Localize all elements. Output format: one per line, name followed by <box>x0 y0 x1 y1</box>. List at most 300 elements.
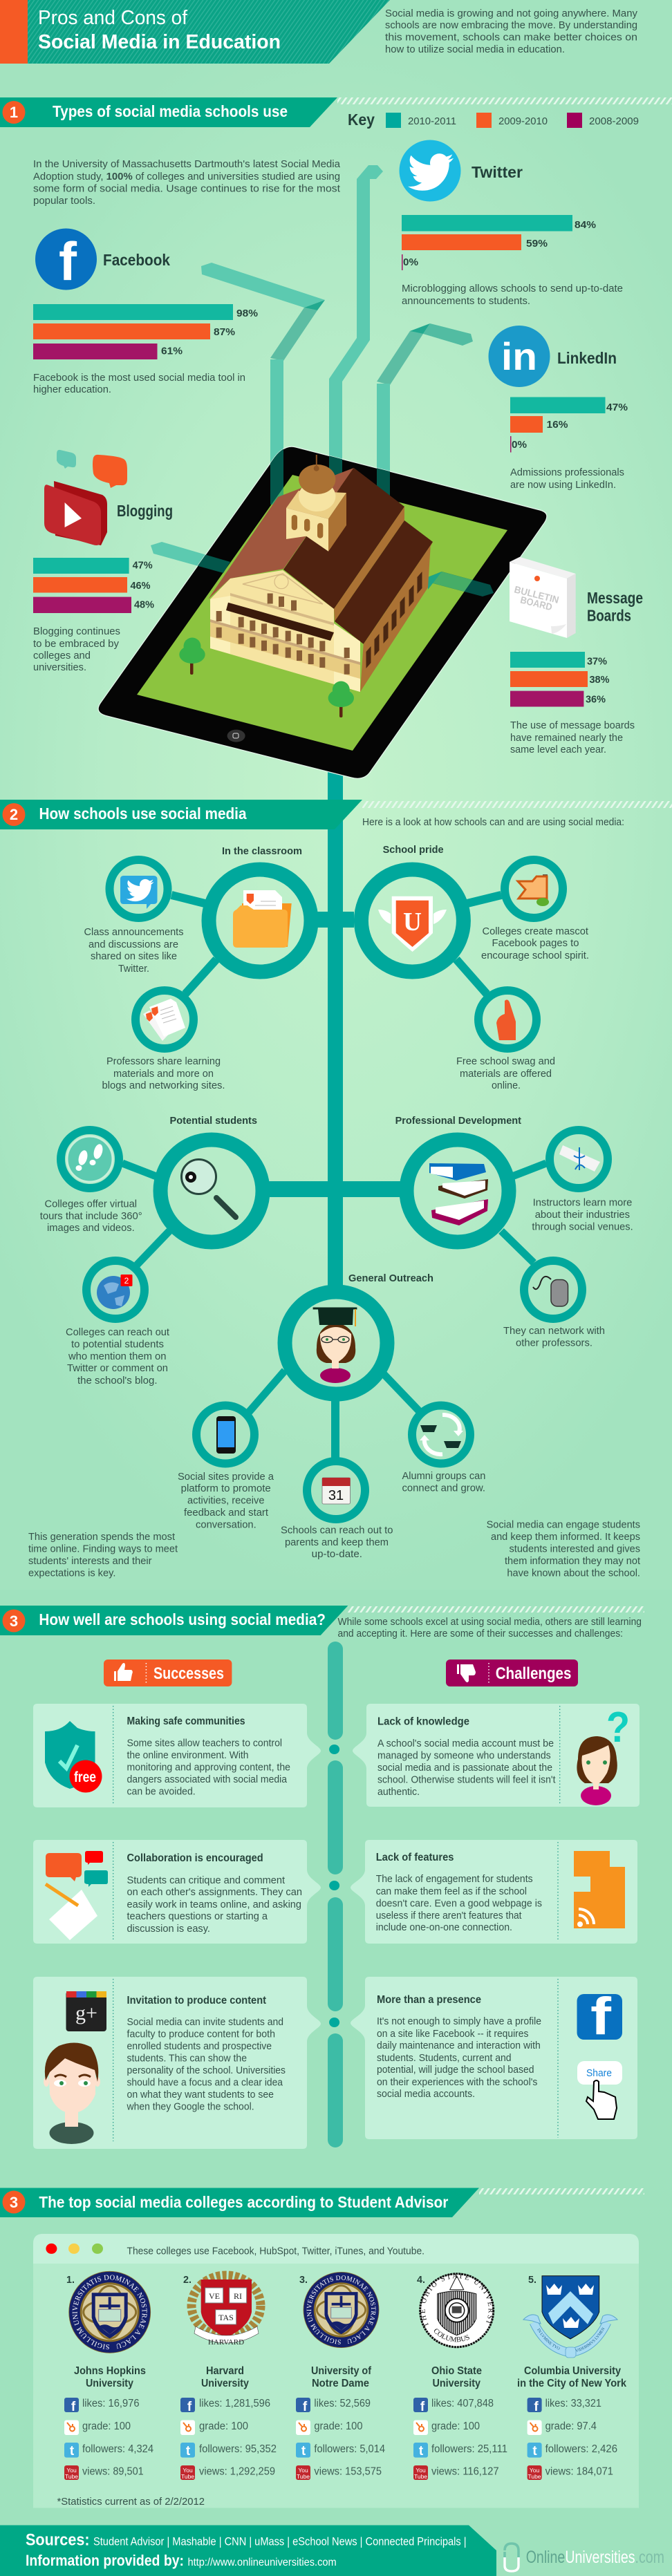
title: Pros and Cons of <box>38 7 188 29</box>
college 4: Ohio State <box>431 2365 482 2377</box>
section 1 heading <box>0 97 672 127</box>
stats: likes: 16,976 <box>82 2398 140 2409</box>
hub: general outreach: General Outreach <box>348 1272 433 1284</box>
hub: in the classroom: blogs and networking sites. <box>102 1080 225 1091</box>
icon: twitter <box>400 140 460 202</box>
stats: Tube <box>528 2473 541 2480</box>
crowns <box>546 2284 594 2328</box>
hub: in the classroom <box>84 845 329 1091</box>
icon: share button with cursor: Share <box>586 2067 612 2079</box>
stats <box>180 2398 277 2480</box>
section 2 heading: 2 <box>10 806 18 823</box>
bar chart: facebook: 87% <box>214 327 235 338</box>
college 1: University <box>86 2378 133 2389</box>
hub: general outreach: up-to-date. <box>312 1548 362 1560</box>
card: lack of features: can make them feel as if the school <box>376 1886 527 1897</box>
linkedin panel <box>488 326 628 491</box>
bar chart: message boards <box>510 652 610 706</box>
trees <box>179 637 354 717</box>
stats: grade: 100 <box>82 2420 131 2432</box>
card: making safe communities: can be avoided. <box>127 1786 196 1798</box>
card: invitation to produce content: enrolled students and prospective <box>127 2040 272 2052</box>
sources: Student Advisor | Mashable | CNN | uMass | eSchool News | Connected Principals | <box>93 2535 466 2548</box>
stats: You <box>416 2467 426 2474</box>
icon: bulletin board: BULLETIN <box>513 583 560 605</box>
crest: harvard: HARVARD <box>208 2338 244 2347</box>
facebook panel <box>33 228 258 395</box>
key legend <box>348 111 639 129</box>
bar chart: linkedin: 0% <box>512 440 527 451</box>
footnote: *Statistics current as of 2/2/2012 <box>57 2496 205 2508</box>
icon: calendar <box>322 1478 350 1504</box>
crest: columbia <box>523 2275 618 2358</box>
icon: bubbles, pencil and paper <box>46 1851 108 1940</box>
information provided by: http://www.onlineuniversities.com <box>188 2557 337 2568</box>
card: collaboration: Students can critique and comment <box>127 1874 286 1886</box>
linkedin panel: Admissions professionals <box>510 467 624 478</box>
college 1 <box>64 2271 153 2480</box>
card: more than a presence <box>351 1977 637 2139</box>
hub: professional development: other professors. <box>516 1337 592 1349</box>
message boards panel: have remained nearly the <box>510 732 623 744</box>
stats: followers: 25,111 <box>431 2443 507 2455</box>
card: lack of knowledge: A school's social media account must be <box>377 1738 554 1749</box>
college 2 <box>180 2274 277 2480</box>
icon: mouse <box>533 1277 568 1306</box>
colleges panel <box>33 2234 639 2508</box>
hub: professional development: They can network with <box>503 1325 605 1337</box>
note: engage students <box>487 1519 641 1579</box>
crest: columbia: IN LVMINE TVO <box>537 2328 560 2350</box>
key legend: 2010-2011 <box>408 115 456 127</box>
stats <box>413 2398 507 2480</box>
stats: followers: 4,324 <box>82 2443 153 2455</box>
college 3: University of <box>311 2365 372 2377</box>
card: invitation to produce content: faculty to produce content for both <box>127 2029 275 2040</box>
college 4 <box>413 2273 507 2480</box>
sources <box>26 2531 466 2550</box>
stats: t <box>186 2444 191 2459</box>
icon: magnifier <box>181 1160 236 1217</box>
card: lack of features: The lack of engagement for students <box>376 1873 533 1885</box>
stats: f <box>303 2400 308 2414</box>
intro text: this movement, schools can make better choices on <box>385 32 637 43</box>
linkedin panel: LinkedIn <box>557 349 617 367</box>
bar chart: message boards: 38% <box>589 675 610 686</box>
card: invitation to produce content: Social media can invite students and <box>127 2016 283 2028</box>
card: invitation to produce content: should have a focus and a clear idea <box>127 2077 283 2089</box>
note: this generation: expectations is key. <box>28 1567 115 1579</box>
college 3: 3. <box>299 2274 308 2286</box>
hub: school pride <box>342 844 589 1091</box>
hub: potential students: images and videos. <box>47 1222 135 1234</box>
bar chart: blogging: 48% <box>134 600 154 611</box>
icon: question mark: ? <box>606 1704 630 1751</box>
stats: f <box>187 2400 192 2414</box>
hub: general outreach <box>178 1272 485 1560</box>
card: invitation to produce content <box>33 1977 321 2149</box>
stats: views: 153,575 <box>314 2466 382 2478</box>
stats: grade: 97.4 <box>545 2420 597 2432</box>
message boards panel <box>510 557 643 755</box>
stats: Tube <box>181 2473 194 2480</box>
card: invitation to produce content: when they Google the school. <box>127 2101 254 2113</box>
linkedin panel: are now using LinkedIn. <box>510 479 616 491</box>
icon: facebook: f <box>59 231 77 292</box>
central pillar <box>328 1642 343 2147</box>
icon: bulletin board <box>510 557 576 638</box>
bar chart: facebook: 98% <box>236 308 258 319</box>
icon: speech bubbles and video <box>44 450 127 545</box>
hub: potential students: Twitter or comment on <box>67 1362 168 1374</box>
note: engage students: have known about the school. <box>507 1567 640 1579</box>
card: collaboration <box>33 1840 321 1944</box>
crest: columbia: VIDEBIMVS LVMEN <box>575 2327 604 2352</box>
college 4: University <box>433 2378 480 2389</box>
crest: ohio state: COLUMBUS <box>434 2329 469 2342</box>
key legend: Key <box>348 111 375 129</box>
icon: globe: 2 <box>124 1276 129 1286</box>
hub: in the classroom: In the classroom <box>222 845 302 857</box>
crest: harvard: TAS <box>218 2313 234 2322</box>
logo: online universities: OnlineUniversities.com <box>526 2548 664 2567</box>
hub: potential students: Colleges offer virtual <box>44 1198 137 1210</box>
icon: flag <box>518 874 549 906</box>
hub: in the classroom: Class announcements <box>84 926 184 938</box>
hub: potential students: Potential students <box>170 1115 257 1127</box>
college 2: Harvard <box>206 2365 244 2377</box>
college 5: 5. <box>528 2274 536 2286</box>
card: making safe communities: Some sites allow teachers to control <box>127 1738 282 1749</box>
icon: globe <box>97 1275 133 1309</box>
stats <box>64 2398 153 2480</box>
stats: f <box>534 2400 539 2414</box>
hub: professional development <box>342 1115 633 1349</box>
card: making safe communities: Making safe communities <box>127 1715 245 1727</box>
stats: You <box>298 2467 308 2474</box>
blogging panel: universities. <box>33 661 86 673</box>
section 2 heading: How schools use social media <box>39 805 247 822</box>
bar chart: linkedin <box>510 397 628 452</box>
blogging panel: Blogging <box>117 502 173 520</box>
section 2 intro: Here is a look at how schools can and are using social media: <box>362 816 624 828</box>
stats <box>528 2398 617 2480</box>
college 3: Notre Dame <box>312 2378 369 2389</box>
stats: views: 184,071 <box>545 2466 613 2478</box>
icon: papers <box>143 999 185 1041</box>
button: successes: Successes <box>153 1664 224 1683</box>
hub: school pride: Colleges create mascot <box>483 925 589 937</box>
message boards panel: Boards <box>587 607 631 625</box>
blogging panel: to be embraced by <box>33 638 119 650</box>
section 3 intro: and accepting it. Here are some of their successes and challenges: <box>337 1628 623 1639</box>
footer <box>0 2526 496 2576</box>
card: lack of knowledge: school. Otherwise students will feel it isn't <box>377 1774 556 1786</box>
note: this generation <box>28 1531 178 1579</box>
card: making safe communities <box>33 1704 321 1807</box>
icon: facebook square <box>577 1987 622 2046</box>
colleges panel: These colleges use Facebook, HubSpot, Twitter, iTunes, and Youtube. <box>127 2245 424 2257</box>
stats: t <box>70 2444 75 2459</box>
ribbon over lawn <box>271 488 473 592</box>
section 4 heading: 3 <box>10 2194 18 2211</box>
card: collaboration: teachers questions or starting a <box>127 1910 268 1922</box>
icon: facebook square: f <box>590 1987 612 2046</box>
twitter panel: announcements to students. <box>402 295 530 307</box>
hub: in the classroom: materials and more on <box>113 1068 214 1080</box>
intro paragraph <box>33 158 341 207</box>
twitter panel: Microblogging allows schools to send up-to-date <box>402 283 623 294</box>
hub: general outreach: activities, receive <box>187 1495 264 1507</box>
icon: winged shield <box>378 896 447 952</box>
hub: in the classroom: shared on sites like <box>91 950 177 962</box>
crest: ohio state: THE OHIO STATE UNIVERSITY <box>420 2273 494 2328</box>
stats: views: 89,501 <box>82 2466 144 2478</box>
card: making safe communities: dangers associated with social media <box>127 1774 288 1785</box>
card: lack of features <box>351 1840 637 1944</box>
blogging panel: colleges and <box>33 650 91 661</box>
bar chart: blogging <box>33 558 154 613</box>
bar chart: blogging: 46% <box>130 581 151 592</box>
bar chart: twitter: 59% <box>526 238 548 250</box>
note: engage students: Social media can engage students <box>487 1519 640 1531</box>
message boards panel: same level each year. <box>510 744 606 755</box>
icon: books <box>429 1163 488 1225</box>
stats: You <box>530 2467 539 2474</box>
button: successes <box>104 1660 232 1686</box>
sources: Sources: <box>26 2531 90 2550</box>
hub: school pride: Free school swag and <box>456 1055 555 1067</box>
ribbon overlays on tablet <box>198 449 494 596</box>
stats: Tube <box>414 2473 427 2480</box>
window dots <box>46 2244 103 2254</box>
crest: seal: SIGILLUM UNIVERSITATIS DOMINAE NOSTRAE A LACU <box>72 2275 147 2350</box>
blogging panel: Blogging continues <box>33 626 120 637</box>
card: more than a presence: potential, will judge the school based <box>377 2064 534 2076</box>
bar chart: facebook: 61% <box>161 346 183 357</box>
twitter panel: Twitter <box>472 163 523 181</box>
stats: views: 1,292,259 <box>199 2466 275 2478</box>
note: this generation: students' interests and their <box>28 1555 152 1567</box>
icon: shield with free badge: free <box>74 1769 96 1785</box>
icon: phone <box>216 1416 236 1454</box>
card: invitation to produce content: on what they want students to see <box>127 2089 274 2100</box>
intro text: Social media is growing and not going anywhere. Many <box>385 8 637 19</box>
icon: shield with free badge <box>45 1721 102 1793</box>
icon: puzzle with rss <box>574 1851 625 1928</box>
header banner <box>0 0 390 64</box>
card: lack of features: include one-on-one connection. <box>376 1921 512 1933</box>
hub: in the classroom: Twitter. <box>118 963 149 975</box>
card: more than a presence: daily maintenance and interaction with <box>377 2040 541 2051</box>
card: lack of knowledge: managed by someone who understands <box>377 1750 551 1762</box>
information provided by <box>26 2552 337 2569</box>
twitter panel <box>400 140 623 307</box>
hub: professional development: through social venues. <box>532 1221 633 1233</box>
facebook panel: Facebook is the most used social media tool in <box>33 372 245 384</box>
stats: Tube <box>65 2473 78 2480</box>
stats: likes: 1,281,596 <box>199 2398 270 2409</box>
hub: general outreach: Alumni groups can <box>402 1470 485 1482</box>
icon: folder <box>233 890 292 948</box>
message boards panel: Message <box>587 589 643 607</box>
stats: You <box>183 2467 193 2474</box>
stats: likes: 33,321 <box>545 2398 601 2409</box>
intro paragraph: Adoption study, 100% of colleges and universities studied are using <box>33 171 340 182</box>
bar chart: twitter: 0% <box>403 257 418 268</box>
crest: seal: SIGILLUM UNIVERSITATIS DOMINAE NOSTRAE A LACU <box>307 2275 376 2344</box>
section 3 heading: How well are schools using social media? <box>39 1610 326 1628</box>
icon: graduate <box>313 1308 357 1383</box>
icon: diploma <box>559 1145 600 1172</box>
college 5: in the City of New York <box>517 2378 626 2389</box>
hub: general outreach: connect and grow. <box>402 1482 485 1494</box>
hub: school pride: materials are offered <box>460 1068 552 1080</box>
intro text <box>385 8 637 55</box>
logo: online universities <box>505 2544 664 2571</box>
college 2: 2. <box>183 2274 192 2286</box>
intro text: schools are now embracing the move. By understanding <box>385 19 637 31</box>
stats <box>296 2398 385 2480</box>
card: lack of knowledge <box>353 1704 640 1807</box>
college 1: 1. <box>66 2274 75 2286</box>
card: making safe communities: monitoring and approving content, the <box>127 1762 290 1774</box>
hub: in the classroom: Professors share learning <box>106 1055 221 1067</box>
building <box>208 455 433 692</box>
stats: t <box>532 2444 537 2459</box>
crest: harvard: RI <box>234 2291 242 2301</box>
stats: f <box>71 2400 76 2414</box>
stats: grade: 100 <box>314 2420 363 2432</box>
card: more than a presence: on a site like Facebook -- it requires <box>377 2028 528 2040</box>
bar chart: message boards: 36% <box>586 694 606 705</box>
icon: winged shield: U <box>403 908 422 937</box>
college 2: University <box>201 2378 249 2389</box>
section 3 intro: While some schools excel at using social media, others are still learning <box>337 1616 642 1628</box>
cupola <box>286 455 346 552</box>
hub: potential students: tours that include 360° <box>40 1210 142 1222</box>
button: challenges: Challenges <box>496 1664 571 1683</box>
hub: professional development: about their industries <box>535 1209 630 1221</box>
college 3 <box>296 2272 385 2480</box>
card: lack of knowledge: authentic. <box>377 1786 420 1798</box>
title <box>38 7 281 53</box>
key legend: 2009-2010 <box>498 115 548 127</box>
card: collaboration: on each other's assignments. They can <box>127 1886 302 1898</box>
icon: linkedin <box>488 326 550 387</box>
bar chart: blogging: 47% <box>133 560 153 571</box>
card: invitation to produce content: students. This can show the <box>127 2053 247 2065</box>
hub: general outreach: parents and keep them <box>285 1536 389 1548</box>
college 5: Columbia University <box>524 2365 621 2377</box>
ribbons behind tablet <box>151 165 473 1286</box>
stats: followers: 5,014 <box>314 2443 385 2455</box>
hub: school pride: online. <box>492 1080 521 1091</box>
icon: calendar: 31 <box>328 1488 344 1503</box>
section 3 intro <box>337 1616 642 1639</box>
facebook panel: Facebook <box>103 251 170 269</box>
card: invitation to produce content: Invitation to produce content <box>127 1995 267 2006</box>
message boards panel: The use of message boards <box>510 720 635 731</box>
hub: general outreach: platform to promote <box>181 1483 271 1494</box>
intro paragraph: In the University of Massachusetts Dartmouth's latest Social Media <box>33 158 341 170</box>
card: lack of features: Lack of features <box>376 1852 454 1863</box>
note: engage students: them information they may not <box>505 1555 641 1567</box>
hub: school pride: School pride <box>383 844 444 856</box>
stats: t <box>301 2444 306 2459</box>
stats: t <box>419 2444 424 2459</box>
note: this generation: time online. Finding ways to meet <box>28 1543 178 1555</box>
icon: twitter bubble <box>120 876 158 909</box>
icon: student man <box>44 2042 100 2144</box>
blogging panel <box>33 450 173 673</box>
section 3 heading <box>0 1606 644 1635</box>
stats: Tube <box>297 2473 310 2480</box>
hub: potential students: to potential students <box>71 1338 164 1351</box>
title: Social Media in Education <box>38 31 281 53</box>
intro paragraph: popular tools. <box>33 195 95 207</box>
information provided by: Information provided by: <box>26 2552 184 2569</box>
card: collaboration: discussion is easy. <box>127 1923 210 1935</box>
hub: school pride: encourage school spirit. <box>481 950 589 961</box>
icon: alumni caps <box>420 1415 463 1454</box>
bar chart: message boards: 37% <box>587 656 607 667</box>
card: more than a presence: More than a presence <box>377 1994 481 2006</box>
hub: potential students: the school's blog. <box>77 1375 158 1386</box>
facebook panel: higher education. <box>33 384 111 395</box>
stats: grade: 100 <box>199 2420 248 2432</box>
card: invitation to produce content: personality of the school. Universities <box>127 2065 286 2076</box>
card: more than a presence: students. Students, current and <box>377 2052 512 2064</box>
hub: professional development: Instructors learn more <box>533 1197 632 1209</box>
icon: bulletin board: BOARD <box>519 594 553 612</box>
card: more than a presence: on their experiences with the school's <box>377 2076 537 2088</box>
stats: You <box>66 2467 77 2474</box>
bar chart: twitter: 84% <box>575 220 596 231</box>
college 1: Johns Hopkins <box>74 2365 146 2377</box>
stats: followers: 95,352 <box>199 2443 277 2455</box>
card: lack of features: doesn't care. Even a good webpage is <box>376 1898 542 1910</box>
stats: followers: 2,426 <box>545 2443 617 2455</box>
hub: potential students: who mention them on <box>68 1351 166 1362</box>
card: lack of knowledge: Lack of knowledge <box>377 1716 469 1728</box>
hub: general outreach: feedback and start <box>184 1507 269 1519</box>
hub: professional development: Professional Development <box>395 1115 521 1127</box>
stats: views: 116,127 <box>431 2466 499 2478</box>
stats: grade: 100 <box>431 2420 480 2432</box>
college 4: 4. <box>417 2274 425 2286</box>
icon: thumbs down <box>457 1664 476 1682</box>
intro paragraph: some form of social media. Usage continues to rise for the most <box>33 182 341 195</box>
note: engage students: and keep them informed. It keeps <box>491 1531 640 1543</box>
crest: harvard <box>192 2275 261 2347</box>
stats: f <box>420 2400 425 2414</box>
stats: likes: 52,569 <box>314 2398 371 2409</box>
icon: google plus: g+ <box>75 2002 97 2024</box>
section 3 heading: 3 <box>10 1613 18 1630</box>
note: this generation: This generation spends the most <box>28 1531 176 1543</box>
card: lack of knowledge: social media and is passionate about the <box>377 1762 552 1774</box>
icon: foam finger <box>496 999 516 1040</box>
bar chart: twitter <box>402 215 596 270</box>
bar chart: facebook <box>33 304 258 359</box>
card: lack of features: useless if there aren't features that <box>376 1910 522 1921</box>
card: more than a presence: It's not enough to simply have a profile <box>377 2015 541 2027</box>
card: collaboration: easily work in teams online, and asking <box>127 1899 301 1910</box>
stats: likes: 407,848 <box>431 2398 494 2409</box>
icon: thumbs up <box>114 1663 133 1681</box>
note: engage students: students interested and gives <box>509 1543 640 1555</box>
